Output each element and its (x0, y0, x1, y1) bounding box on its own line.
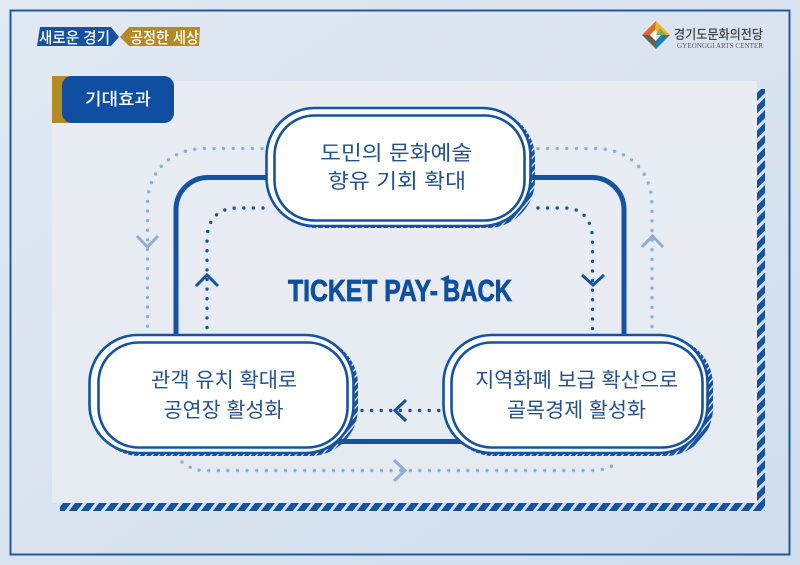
arrow: middle left (395, 400, 406, 421)
panel: main content (52, 81, 765, 511)
tab gold accent (52, 76, 82, 123)
box text: 공연장 활성화 (164, 399, 284, 422)
tab blue body (62, 76, 174, 123)
outer path bottom (182, 462, 618, 470)
logo: Gyeonggi Arts Center (642, 21, 763, 50)
slogan: blue part: 새로운 경기 (39, 29, 110, 47)
heading text: 기대효과 (85, 90, 151, 109)
arrow: inner right down (582, 275, 604, 285)
box text: 향유 기회 확대 (328, 170, 466, 193)
node: right box (444, 335, 713, 456)
inner path left (207, 208, 263, 334)
hatch shadow (269, 110, 535, 228)
panel hatch border bottom (60, 503, 765, 511)
inner path right (538, 208, 592, 334)
panel background (52, 81, 757, 503)
logo name Korean: 경기도문화의전당 (674, 27, 763, 42)
arrow: outer bottom right (394, 460, 405, 481)
arrow: outer left down (137, 236, 158, 247)
icon: logo diamond (642, 21, 670, 49)
inner path middle (362, 409, 442, 412)
cycle: inner dark dotted loop (207, 208, 592, 410)
inner outline (98, 342, 348, 448)
cycle: solid loop (176, 178, 624, 442)
cycle: outer light dotted loop (148, 148, 652, 470)
title: small arrow tip (440, 275, 449, 283)
slogan badge (37, 27, 200, 47)
heading tab (52, 76, 174, 123)
outer outline (444, 335, 708, 453)
node: left box (90, 335, 358, 456)
logo name English: GYEONGGI ARTS CENTER (677, 42, 763, 50)
center title (288, 273, 512, 308)
inner outline (452, 342, 702, 448)
inner outline (274, 116, 524, 220)
arrow: outer right up (642, 236, 663, 247)
title: first part: TICKET PAY- (288, 273, 438, 308)
box text: 골목경제 활성화 (507, 399, 646, 422)
outer path left (148, 148, 262, 335)
outer outline (90, 335, 354, 453)
box text: 관객 유치 확대로 (151, 369, 297, 392)
arrow: inner left up (196, 275, 218, 286)
hatch shadow (446, 337, 713, 456)
node: top box (266, 108, 535, 228)
outer path right (538, 148, 652, 335)
outer outline (266, 108, 530, 226)
hatch shadow (92, 337, 358, 456)
title: second part: BACK (443, 273, 512, 308)
box text: 지역화폐 보급 확산으로 (475, 369, 678, 392)
panel hatch border right (757, 89, 765, 511)
slogan: gold part: 공정한 세상 (130, 29, 199, 47)
box text: 도민의 문화예술 (320, 142, 472, 165)
